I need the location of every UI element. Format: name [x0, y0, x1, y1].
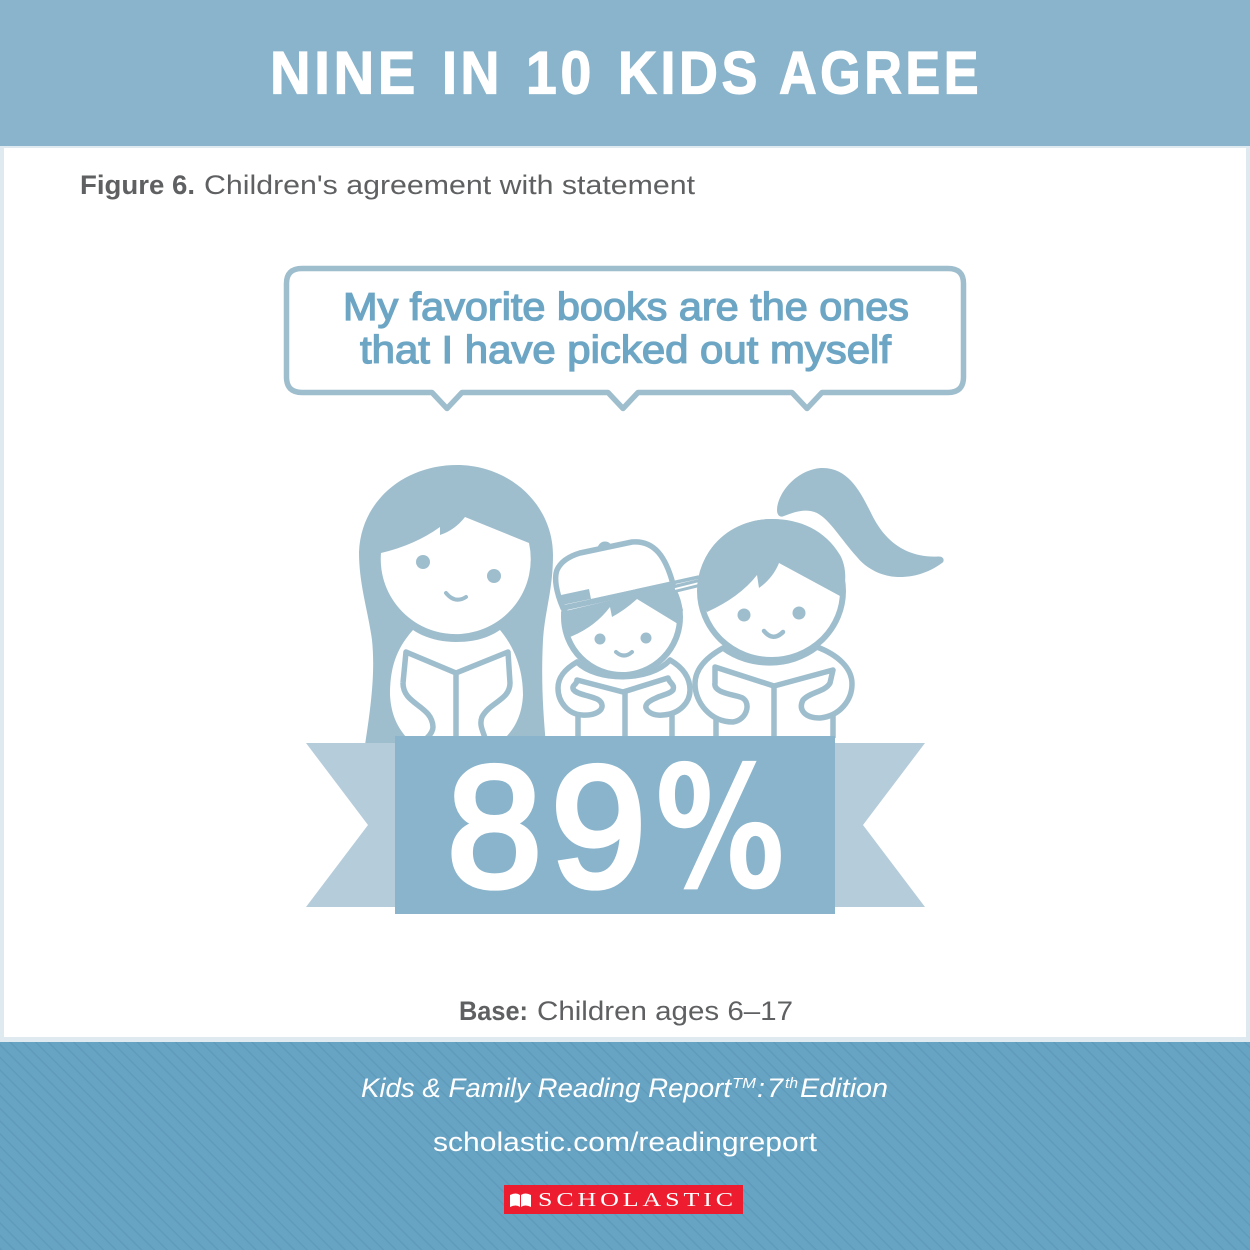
report title: Kids & Family Reading Report [361, 1073, 733, 1103]
ribbon banner with 89% [306, 730, 925, 928]
illustration: three children reading [359, 465, 944, 745]
footer band [0, 1042, 1250, 1250]
title: 10 [526, 40, 595, 106]
child: girl with ponytail [695, 468, 944, 738]
figure caption: Figure 6. [80, 170, 195, 200]
report title: th [785, 1075, 798, 1092]
ribbon tail left [306, 743, 396, 907]
ribbon tail right [834, 743, 925, 907]
banner [395, 736, 835, 914]
scholastic logo [504, 1185, 743, 1214]
report title: 7 [767, 1073, 784, 1103]
percentage: 8 [447, 731, 542, 923]
report title: TM [732, 1075, 757, 1092]
percentage [447, 730, 785, 928]
report title: Edition [800, 1073, 888, 1103]
child: boy with backwards cap [556, 542, 699, 738]
title: AGREE [779, 40, 982, 106]
header band [0, 0, 1250, 146]
scholastic logo: SCHOLASTIC [538, 1189, 737, 1211]
report title [361, 1073, 888, 1103]
speech bubble with statement [286, 268, 964, 408]
base note: Base: [459, 996, 528, 1026]
title: KIDS [618, 40, 761, 106]
cap [556, 542, 699, 608]
title: NINE [270, 40, 419, 106]
percentage: 9 [551, 731, 646, 923]
figure caption: Children's agreement with statement [204, 170, 696, 200]
child: older girl with long hair [359, 465, 553, 745]
base note: Children ages 6–17 [537, 996, 793, 1026]
percentage: % [655, 730, 785, 928]
title [270, 40, 982, 106]
speech bubble with statement: My favorite books are the ones [343, 286, 909, 329]
report url: scholastic.com/readingreport [433, 1127, 818, 1157]
speech bubble with statement: that I have picked out myself [360, 329, 891, 372]
title: IN [442, 40, 503, 106]
report title: : [757, 1073, 765, 1103]
